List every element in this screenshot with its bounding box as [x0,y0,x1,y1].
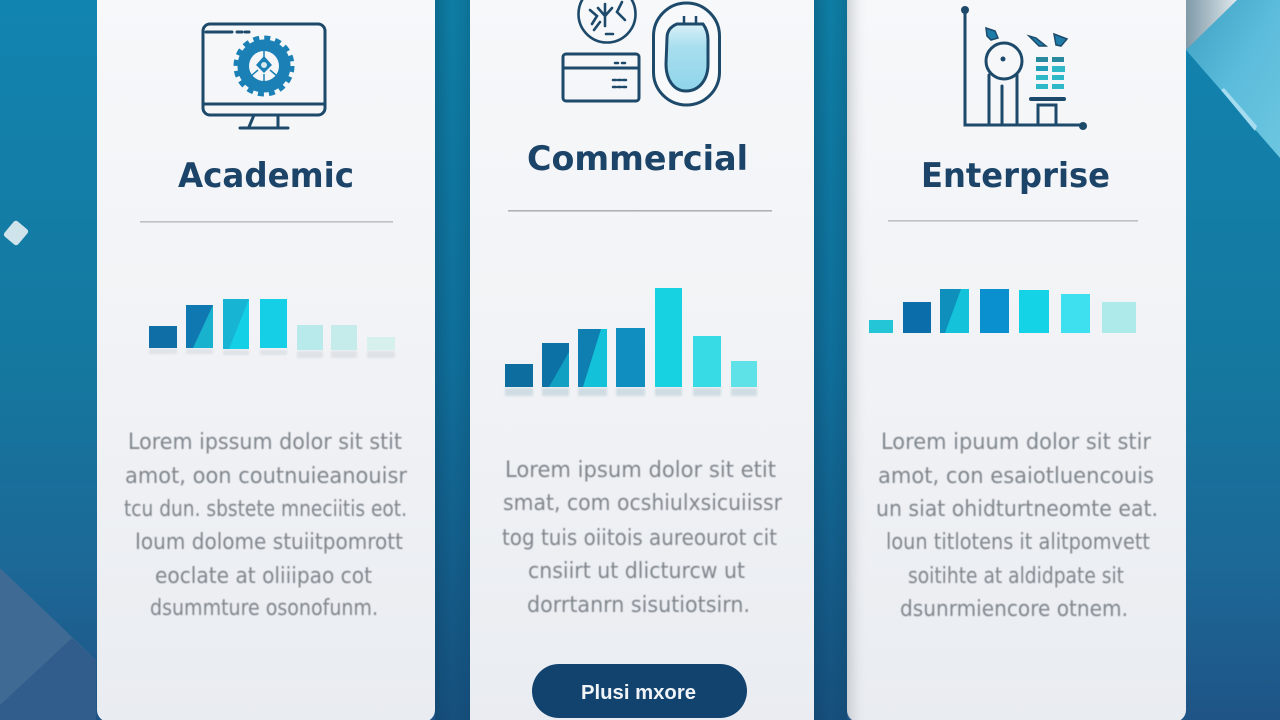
text block: Commercial: cnsiirt ut dlicturcw ut [528,559,745,584]
text block: Academic: amot, oon coutnuieanouisr [125,464,408,489]
text block: Commercial [502,458,783,618]
text block: Enterprise [876,430,1158,622]
text block: Commercial: dorrtanrn sisutiotsirn. [527,593,750,618]
bar chart: Enterprise [869,289,1136,333]
heading: Enterprise: Enterprise [921,156,1110,196]
text block: Enterprise: loun titlotens it alitpomvett [886,530,1150,555]
text block: Academic: Ioum dolome stuiitpomrott [135,530,403,555]
panel: Academic [97,0,435,720]
text block: Enterprise: un siat ohidturtneomte eat. [876,497,1158,522]
text block: Commercial: smat, com ocshiulxsicuiissr [503,491,783,516]
text block: Enterprise: dsunrmiencore otnem. [900,597,1128,622]
bar chart: Commercial [505,288,757,396]
text block: Enterprise: soitihte at aldidpate sit [908,564,1124,589]
heading: Commercial: Commercial [527,139,748,179]
button [532,664,747,718]
text block: Commercial: tog tuis oiitois aureourot cit [502,526,777,551]
text block: Academic: dsummture osonofunm. [150,596,378,621]
text block: Enterprise: amot, con esaiotluencouis [878,464,1154,489]
icon: circuit circle, card and capsule [563,0,720,105]
heading: Academic: Academic [178,156,354,196]
panel: Commercial [470,0,814,720]
text block: Academic: Lorem ipssum dolor sit stit [128,430,402,455]
text block: Academic: eoclate at oliiipao cot [155,564,372,589]
button: Plusi mxore [581,682,696,704]
text block: Commercial: Lorem ipsum dolor sit etit [505,458,776,483]
icon: chart with figure and grid [961,6,1087,130]
text block: Enterprise: Lorem ipuum dolor sit stir [881,430,1152,455]
text block: Academic [124,430,408,621]
panel: Enterprise [847,0,1186,720]
text block: Academic: tcu dun. sbstete mneciitis eot. [124,497,407,522]
bar chart: Academic [149,299,395,358]
icon: monitor with gear [203,24,325,128]
